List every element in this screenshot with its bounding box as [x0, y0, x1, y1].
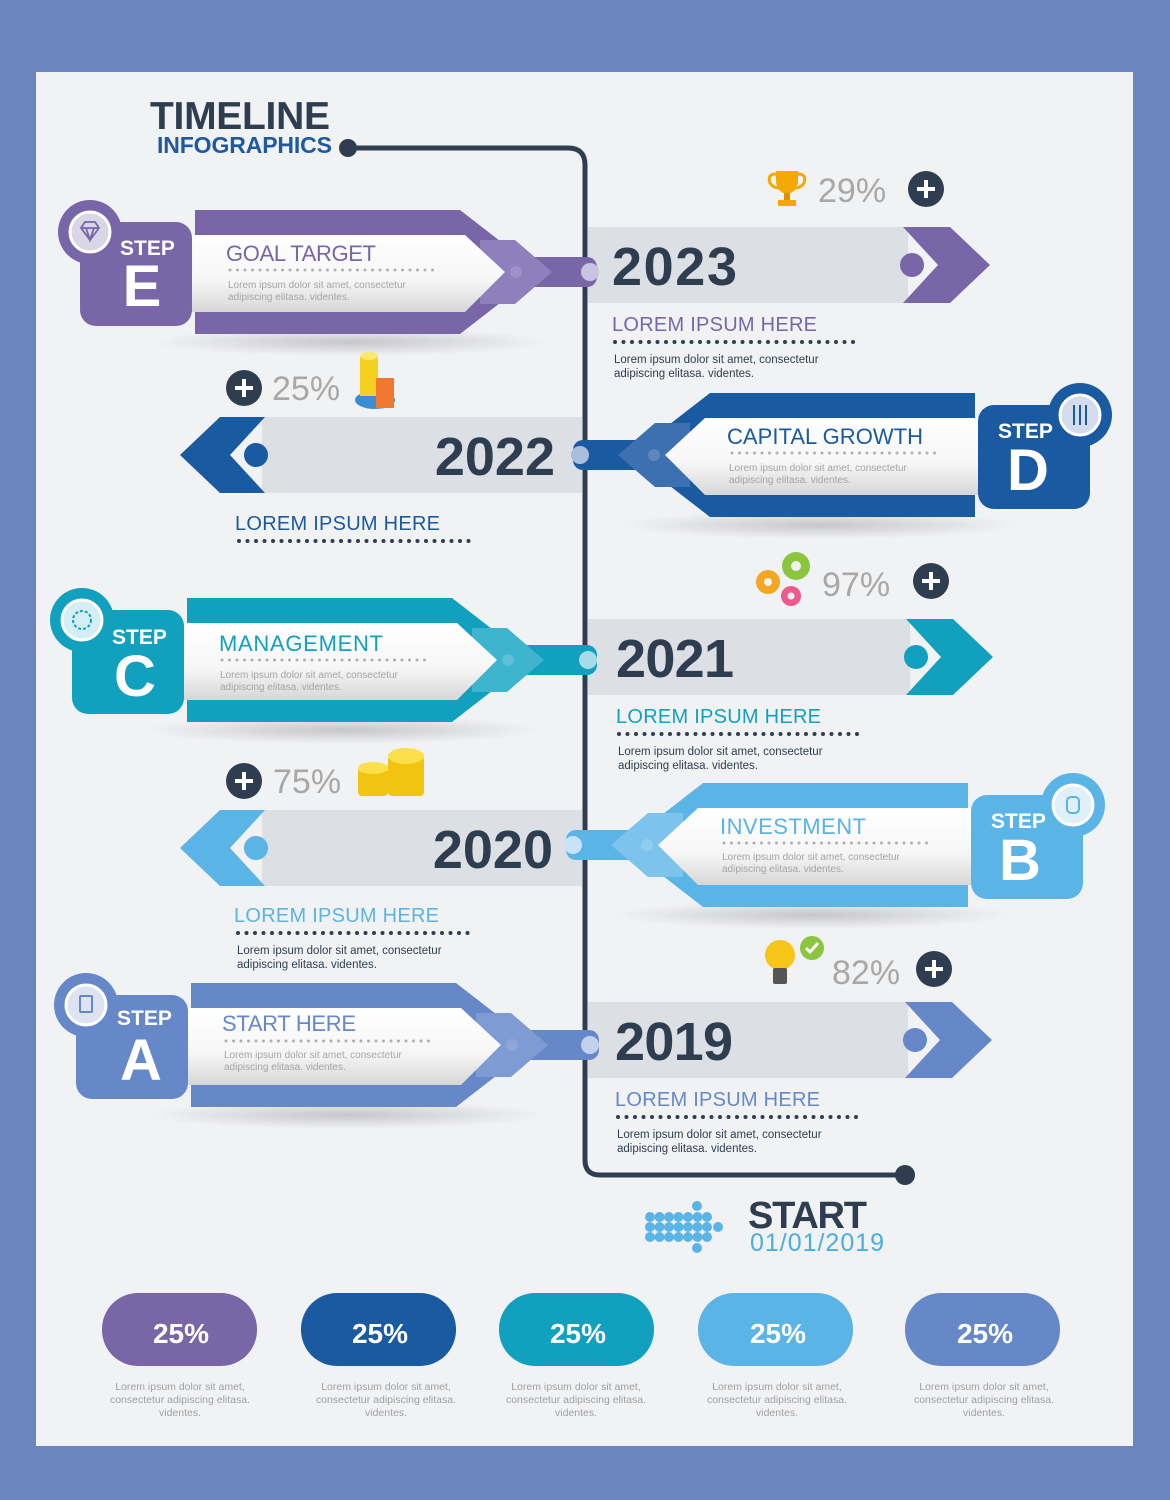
step card D [571, 383, 1112, 539]
pill captions: videntes. [756, 1407, 798, 1419]
year band: 2022 [180, 417, 582, 493]
stat 75% with coins: 75% [273, 763, 341, 801]
step card D: STEP [998, 420, 1053, 443]
text block: 2020: LOREM IPSUM HERE [234, 905, 439, 927]
year band: 2021 [588, 619, 993, 695]
year band: 2020 [180, 810, 582, 886]
text block: 2021 [616, 706, 859, 772]
step card B: Lorem ipsum dolor sit amet, consectetur [722, 852, 901, 863]
step card C: Lorem ipsum dolor sit amet, consectetur [220, 670, 399, 681]
pill captions: consectetur adipiscing elitasa. [110, 1394, 250, 1406]
pill captions: consectetur adipiscing elitasa. [506, 1394, 646, 1406]
bottom pills: 25% [957, 1318, 1013, 1349]
text block: 2020: adipiscing elitasa. videntes. [237, 959, 377, 971]
bottom pills: 25% [750, 1318, 806, 1349]
step card E: Lorem ipsum dolor sit amet, consectetur [228, 280, 407, 291]
pill captions: videntes. [365, 1407, 407, 1419]
text block: 2023: adipiscing elitasa. videntes. [614, 368, 754, 380]
pill captions: Lorem ipsum dolor sit amet, [919, 1381, 1049, 1393]
step card B: INVESTMENT [720, 814, 866, 839]
step card D: Lorem ipsum dolor sit amet, consectetur [729, 463, 908, 474]
stat 25% with chart: 25% [272, 370, 340, 408]
pill captions: consectetur adipiscing elitasa. [914, 1394, 1054, 1406]
year band: 2021: 2021 [616, 629, 734, 689]
stat 97% with gears [756, 552, 949, 606]
bottom pills: 25% [352, 1318, 408, 1349]
step card A: START HERE [222, 1011, 356, 1036]
stat 25% with chart [226, 352, 395, 409]
bottom pills [102, 1293, 1060, 1366]
step card D: CAPITAL GROWTH [727, 424, 923, 449]
step card A [54, 973, 599, 1129]
step card E: GOAL TARGET [226, 241, 376, 266]
step card B: B [999, 828, 1041, 893]
pill captions: videntes. [159, 1407, 201, 1419]
year band: 2023 [588, 227, 990, 303]
step card C: adipiscing elitasa. videntes. [220, 682, 342, 693]
pill captions: Lorem ipsum dolor sit amet, [321, 1381, 451, 1393]
start label: 01/01/2019 [750, 1229, 884, 1257]
start label: START [748, 1195, 867, 1237]
text block: 2021: adipiscing elitasa. videntes. [618, 760, 758, 772]
year band: 2020: 2020 [433, 820, 553, 880]
stat 29% with trophy: 29% [818, 172, 886, 210]
text block: 2019: Lorem ipsum dolor sit amet, consectetur [617, 1129, 822, 1141]
step card C [50, 588, 597, 744]
text block: 2023: Lorem ipsum dolor sit amet, consectetur [614, 354, 819, 366]
step card B: adipiscing elitasa. videntes. [722, 864, 844, 875]
title: INFOGRAPHICS [157, 132, 332, 158]
step card E: E [123, 254, 161, 319]
timeline line [339, 139, 915, 1185]
text block: 2023 [612, 314, 855, 380]
text block: 2019 [615, 1089, 858, 1155]
text block: 2019: LOREM IPSUM HERE [615, 1089, 820, 1111]
year band: 2022: 2022 [435, 427, 555, 487]
stat 82% with bulb: 82% [832, 954, 900, 992]
stat 97% with gears: 97% [822, 566, 890, 604]
step card B [564, 773, 1105, 929]
year band: 2019 [588, 1002, 992, 1078]
pill captions: Lorem ipsum dolor sit amet, [712, 1381, 842, 1393]
text block: 2021: LOREM IPSUM HERE [616, 706, 821, 728]
pill captions: videntes. [963, 1407, 1005, 1419]
text block: 2019: adipiscing elitasa. videntes. [617, 1143, 757, 1155]
text block: 2021: Lorem ipsum dolor sit amet, consectetur [618, 746, 823, 758]
pill captions: consectetur adipiscing elitasa. [707, 1394, 847, 1406]
step card A: A [120, 1028, 162, 1093]
step card A: STEP [117, 1007, 172, 1030]
year band: 2023: 2023 [612, 237, 737, 297]
pill captions: videntes. [555, 1407, 597, 1419]
bottom pills: 25% [153, 1318, 209, 1349]
step card E: STEP [120, 237, 175, 260]
text block: 2020: Lorem ipsum dolor sit amet, consectetur [237, 945, 442, 957]
text block: 2023: LOREM IPSUM HERE [612, 314, 817, 336]
step card B: STEP [991, 810, 1046, 833]
pill captions: consectetur adipiscing elitasa. [316, 1394, 456, 1406]
step card D: D [1007, 438, 1049, 503]
stat 82% with bulb [765, 936, 952, 992]
stat 29% with trophy [769, 171, 944, 210]
step card D: adipiscing elitasa. videntes. [729, 475, 851, 486]
step card A: Lorem ipsum dolor sit amet, consectetur [224, 1050, 403, 1061]
icon: dotted arrow [645, 1201, 723, 1253]
year band: 2019: 2019 [615, 1012, 733, 1072]
title [150, 95, 332, 158]
pill captions: Lorem ipsum dolor sit amet, [115, 1381, 245, 1393]
step card E: adipiscing elitasa. videntes. [228, 292, 350, 303]
step card C: STEP [112, 626, 167, 649]
text block: 2022: LOREM IPSUM HERE [235, 513, 440, 535]
step card C: MANAGEMENT [219, 631, 383, 656]
step card E [58, 200, 599, 356]
title: TIMELINE [150, 95, 330, 138]
step card A: adipiscing elitasa. videntes. [224, 1062, 346, 1073]
stat 75% with coins [226, 748, 424, 801]
bottom pills: 25% [550, 1318, 606, 1349]
text block: 2020 [234, 905, 476, 971]
start label [748, 1195, 884, 1257]
pill captions: Lorem ipsum dolor sit amet, [511, 1381, 641, 1393]
pill captions [110, 1381, 1054, 1419]
step card C: C [114, 644, 156, 709]
